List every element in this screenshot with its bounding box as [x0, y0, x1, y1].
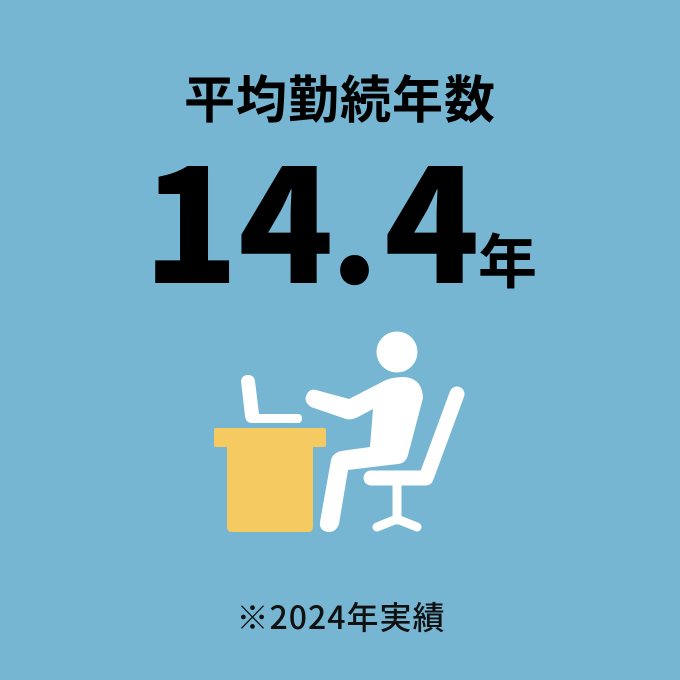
icon: chair [371, 394, 457, 478]
value: 14.4 years [143, 102, 537, 329]
icon: person [306, 332, 457, 532]
footnote: ※2024年実績 [237, 593, 445, 639]
value: 14.4 years: 1 [143, 102, 239, 329]
icon: desk [214, 428, 326, 532]
icon: person working at a desk [214, 332, 457, 532]
value: 14.4 years: . [329, 102, 380, 329]
icon: laptop [241, 375, 302, 423]
value: 14.4 years: 4 [384, 102, 480, 329]
value: 14.4 years: 年 [478, 215, 537, 300]
title: 平均勤続年数 [184, 59, 496, 133]
value: 14.4 years: 4 [238, 102, 334, 329]
